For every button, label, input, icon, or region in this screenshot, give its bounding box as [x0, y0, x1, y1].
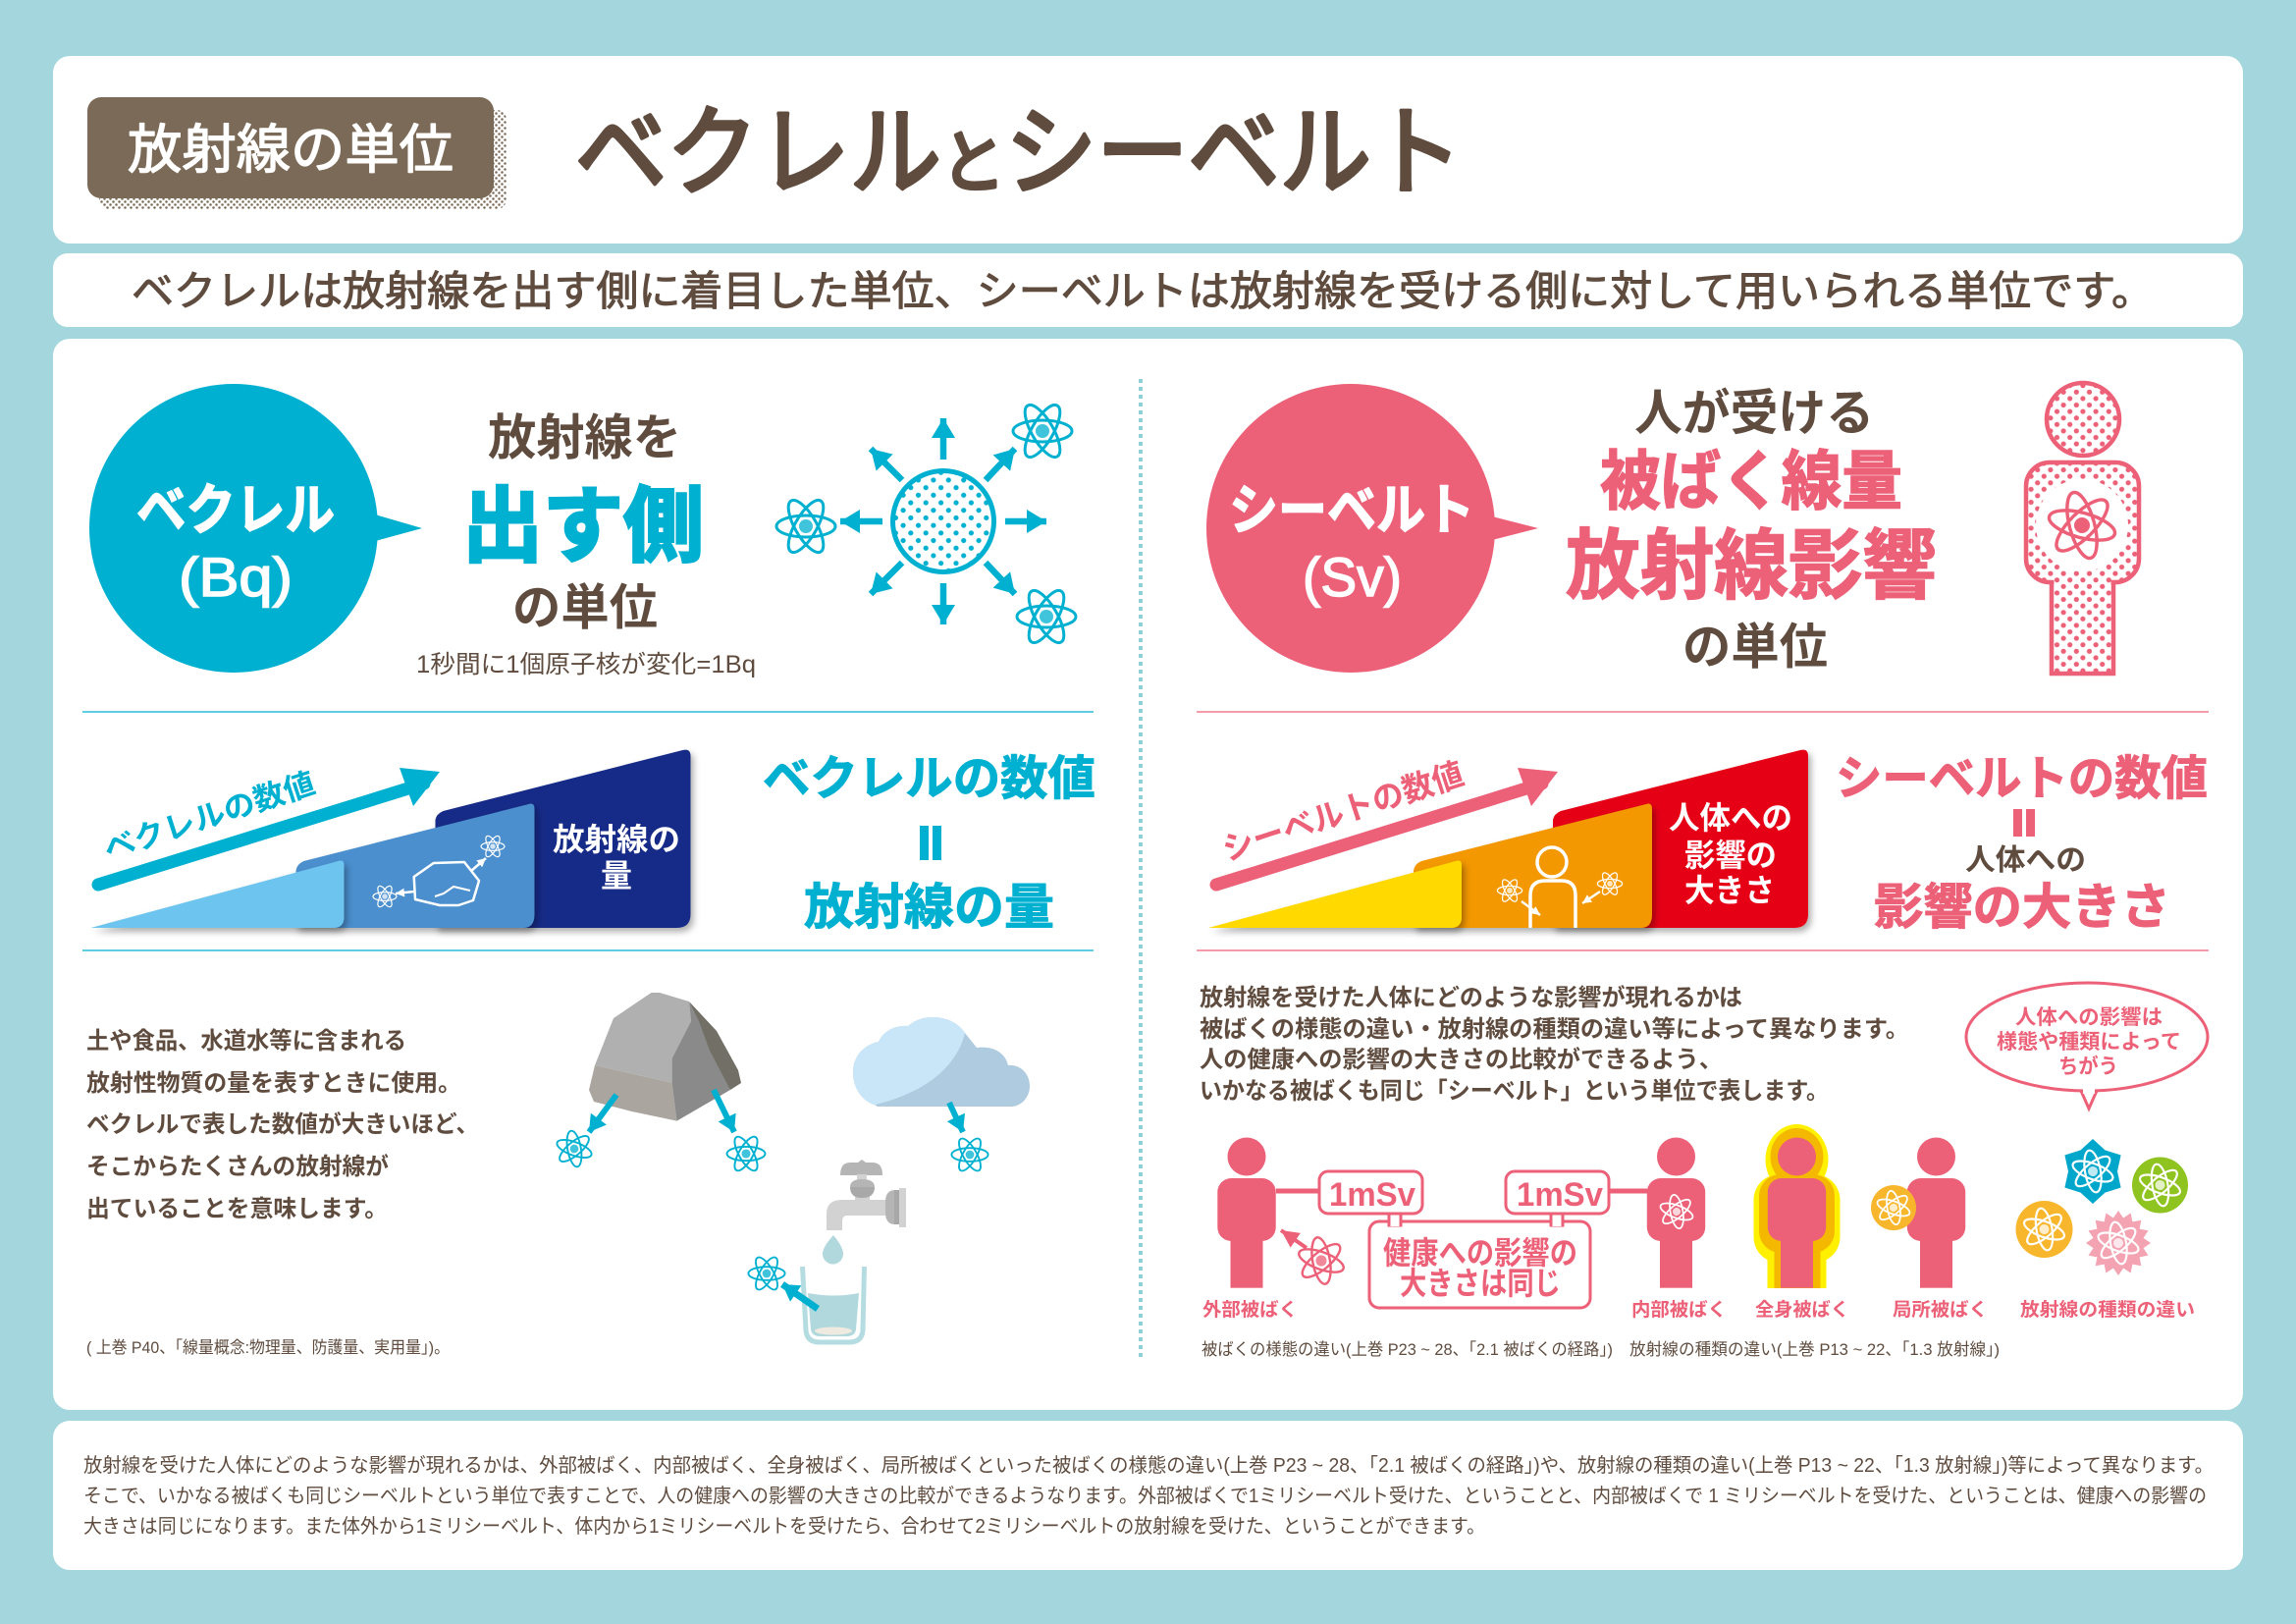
ramp label: size of effect [1669, 800, 1792, 908]
panel: bottom explanation: 大きさは同じになります。また体外から1ミリシーベルト、体内から1ミリシーベルトを受けたら、合わせて2ミリシーベルトの放射線を受けた、ということができます。 [83, 1515, 1485, 1538]
ramp label: size of effect: 大きさ [1684, 873, 1775, 908]
figure: radiation types: 放射線の種類の違い [2020, 1298, 2195, 1321]
badge [87, 97, 494, 198]
figure: local exposure [1871, 1137, 1988, 1321]
text block: becquerel explanation: ベクレルで表した数値が大きいほど、 [86, 1110, 479, 1138]
figure: internal exposure: 内部被ばく [1631, 1299, 1727, 1321]
ramp label: size of effect: 人体への [1669, 800, 1792, 836]
title: ベクレルとシーベルト [575, 98, 1463, 208]
equation: sievert value = size of effect: 人体への [1965, 844, 2086, 877]
ramp label: amount of radiation: 放射線の [553, 822, 680, 857]
callout: effect differs: ちがう [2058, 1055, 2118, 1078]
speech bubble: becquerel [89, 384, 422, 673]
1mSv label: external: 1mSv [1329, 1176, 1415, 1214]
footnotes: sievert [1201, 1340, 2000, 1359]
arrow: sievert value: シーベルトの数値 [1218, 755, 1468, 868]
ramp illustration: radioactive material [373, 834, 505, 909]
panel: main [53, 339, 2243, 1410]
icon: cloud [853, 1017, 1030, 1174]
speech bubble: becquerel: (Bq) [179, 546, 293, 608]
text: receiving side [1566, 386, 1937, 675]
equation: becquerel value = amount: 放射線の量 [804, 880, 1054, 935]
ramp label: amount of radiation: 量 [601, 858, 632, 893]
figure: external exposure: 外部被ばく [1202, 1299, 1298, 1321]
panel: bottom explanation: そこで、いかなる被ばくも同じシーベルトという単位で表すことで、人の健康への影響の大きさの比較ができるようなります。外部被ばくで1ミリシーベルト受けた、ということと、内部被ばくで 1 ミリシーベルトを受けた、ということは、健康への影響の [83, 1485, 2207, 1507]
text block: becquerel explanation: そこからたくさんの放射線が [86, 1153, 389, 1180]
text block: sievert explanation: 被ばくの様態の違い・放射線の種類の違い等によって異なります。 [1200, 1016, 1909, 1043]
text: receiving side: 人が受ける [1634, 386, 1874, 441]
panel: bottom explanation: 放射線を受けた人体にどのような影響が現れるかは、外部被ばく、内部被ばく、全身被ばく、局所被ばくといった被ばくの様態の違い(上巻 P23 ~ 28、「2.1 被ばくの経路」)や、放射線の種類の違い(上巻 P13 ~ 22、「1.3 放射線」)等によって異なります。 [83, 1454, 2214, 1477]
icon: rock [551, 993, 766, 1173]
1mSv label: internal: 1mSv [1517, 1176, 1603, 1214]
panel: bottom explanation [53, 1421, 2243, 1570]
text block: sievert explanation: 放射線を受けた人体にどのような影響が現れるかは [1200, 984, 1742, 1011]
arrow: becquerel value: ベクレルの数値 [99, 766, 319, 867]
text: emitting side: 1秒間に1個原子核が変化=1Bq [416, 651, 756, 678]
equation: becquerel value = amount: ベクレルの数値 [763, 753, 1095, 805]
badge shadow [99, 110, 507, 209]
speech bubble: becquerel: ベクレル [136, 479, 335, 541]
text block: becquerel explanation: 出ていることを意味します。 [86, 1196, 388, 1222]
footnote: becquerel: ( 上巻 P40、「線量概念:物理量、防護量、実用量」)。 [86, 1338, 450, 1357]
equation: sievert value = size of effect [1836, 753, 2208, 935]
panel: summary sentence: ベクレルは放射線を出す側に着目した単位、シーベルトは放射線を受ける側に対して用いられる単位です。 [132, 268, 2154, 314]
text block: becquerel explanation: 放射性物質の量を表すときに使用。 [86, 1070, 461, 1097]
footnotes: sievert: 被ばくの様態の違い(上巻 P23 ~ 28、「2.1 被ばくの経路」) [1201, 1340, 1613, 1359]
equation: sievert value = size of effect: 影響の大きさ [1874, 880, 2170, 935]
health effect same [1383, 1235, 1577, 1301]
figure: radiation types [2016, 1139, 2195, 1321]
text block: becquerel explanation [86, 1028, 479, 1222]
speech bubble: sievert [1206, 384, 1538, 673]
badge: 放射線の単位 [128, 121, 454, 180]
icon: dotted person with atom [2026, 383, 2139, 674]
diagram: equal 1mSv comparison [1276, 1171, 1647, 1308]
text: emitting side: 出す側 [462, 480, 704, 572]
speech bubble: sievert: シーベルト [1229, 479, 1474, 541]
panel: summary sentence [53, 253, 2243, 327]
figure: local exposure: 局所被ばく [1893, 1299, 1988, 1321]
panel: header [53, 56, 2243, 244]
text block: sievert explanation [1200, 984, 1909, 1105]
text: emitting side [416, 410, 756, 678]
figure: whole-body exposure: 全身被ばく [1755, 1299, 1849, 1321]
figure: external exposure [1202, 1137, 1352, 1321]
arrow: sievert value [1216, 755, 1558, 885]
text: receiving side: の単位 [1682, 620, 1828, 675]
health effect same: 健康への影響の [1383, 1235, 1577, 1271]
icon: faucet and glass [748, 1160, 906, 1342]
speech bubble: sievert: (Sv) [1303, 546, 1402, 608]
ramp label: amount of radiation [553, 822, 680, 893]
ramp label: size of effect: 影響の [1684, 838, 1777, 873]
text: emitting side: の単位 [512, 580, 658, 635]
text: receiving side: 放射線影響 [1566, 522, 1937, 609]
callout: effect differs: 人体への影響は [2015, 1006, 2163, 1029]
footnotes: sievert: 放射線の種類の違い(上巻 P13 ~ 22、「1.3 放射線」) [1629, 1340, 2000, 1359]
text: emitting side: 放射線を [488, 410, 681, 465]
callout: effect differs [1966, 983, 2208, 1109]
equation: becquerel value = amount [763, 753, 1095, 935]
health effect same: 大きさは同じ [1400, 1266, 1561, 1301]
ramp illustration: person exposed [1497, 847, 1623, 928]
figure: whole-body exposure [1753, 1124, 1849, 1321]
callout: effect differs: 様態や種類によって [1997, 1031, 2181, 1054]
sievert ramp chart [1208, 750, 1808, 928]
text block: sievert explanation: いかなる被ばくも同じ「シーベルト」という単位で表します。 [1200, 1078, 1829, 1105]
icon: radiating source [776, 401, 1076, 647]
figure: internal exposure [1631, 1137, 1727, 1321]
text block: becquerel explanation: 土や食品、水道水等に含まれる [86, 1028, 406, 1055]
text block: sievert explanation: 人の健康への影響の大きさの比較ができるよう、 [1200, 1046, 1723, 1073]
arrow: becquerel value [98, 766, 440, 885]
text: receiving side: 被ばく線量 [1600, 445, 1902, 517]
becquerel ramp chart [90, 750, 691, 928]
equation: sievert value = size of effect: シーベルトの数値 [1836, 753, 2208, 805]
